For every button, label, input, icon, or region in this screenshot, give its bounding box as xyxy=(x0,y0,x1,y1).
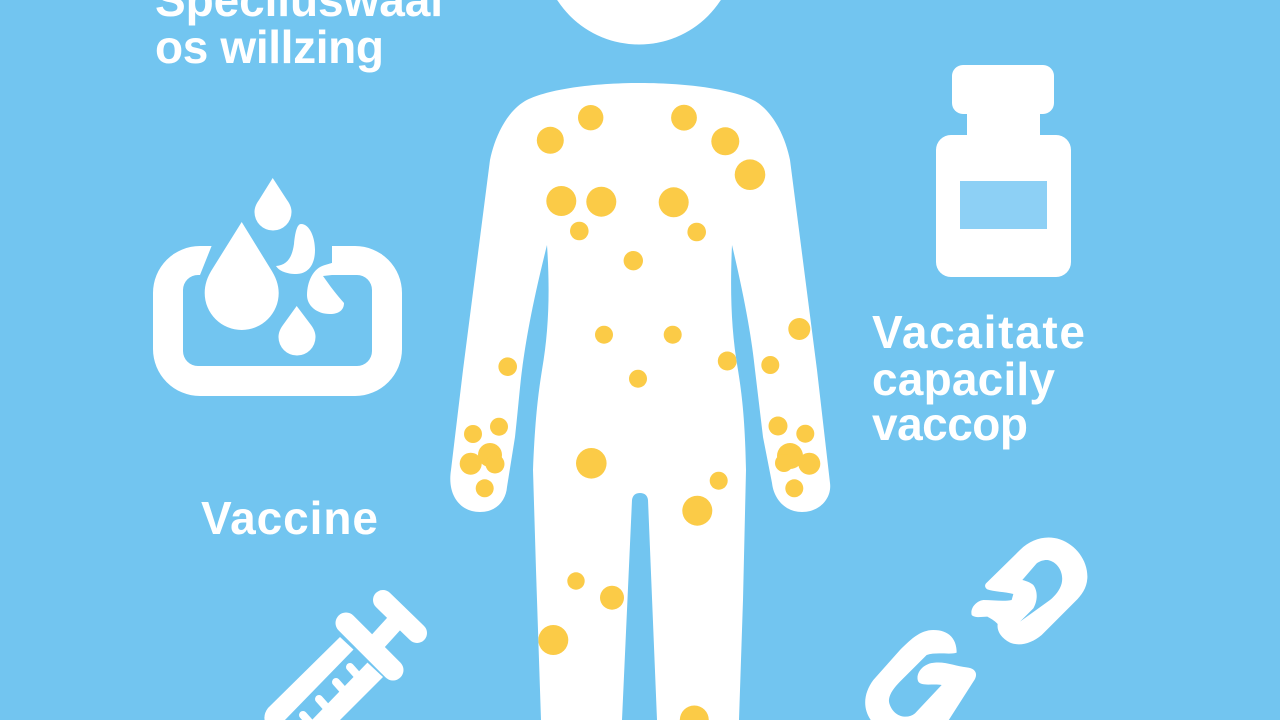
icon: vaccine vial xyxy=(936,65,1071,277)
curved drop xyxy=(276,224,315,274)
lower chain link xyxy=(865,630,976,720)
text block right: capacily xyxy=(872,353,1055,405)
body figure with yellow rash spots xyxy=(450,83,830,720)
plunger handle xyxy=(383,600,417,633)
upper chain link xyxy=(971,538,1087,644)
icon: head xyxy=(542,0,736,44)
plunger rod xyxy=(370,617,400,650)
scale ticks xyxy=(303,667,358,720)
vial neck xyxy=(967,105,1040,145)
vial body xyxy=(936,135,1071,277)
icon: syringe xyxy=(264,600,417,720)
gap in basin top xyxy=(198,240,332,280)
heading text top left xyxy=(155,0,443,73)
basin frame xyxy=(153,246,402,396)
text block right: vaccop xyxy=(872,398,1028,450)
body silhouette xyxy=(450,83,830,720)
large drop xyxy=(205,222,279,330)
barrel xyxy=(264,637,383,720)
vial label xyxy=(960,181,1047,229)
top drop xyxy=(254,178,292,230)
label: Vaccine: Vaccine xyxy=(201,492,378,544)
icon: broken chain xyxy=(865,538,1087,720)
right drop xyxy=(307,263,344,314)
flange xyxy=(346,623,393,670)
text block right xyxy=(872,306,1085,450)
bottom drop xyxy=(278,306,316,356)
vial cap xyxy=(952,65,1054,114)
text block right: Vacaitate xyxy=(872,306,1085,358)
icon: water drops in basin xyxy=(153,178,402,396)
rash spots xyxy=(460,105,820,720)
barrel window xyxy=(283,648,368,720)
heading text top left: os willzing xyxy=(155,21,384,73)
